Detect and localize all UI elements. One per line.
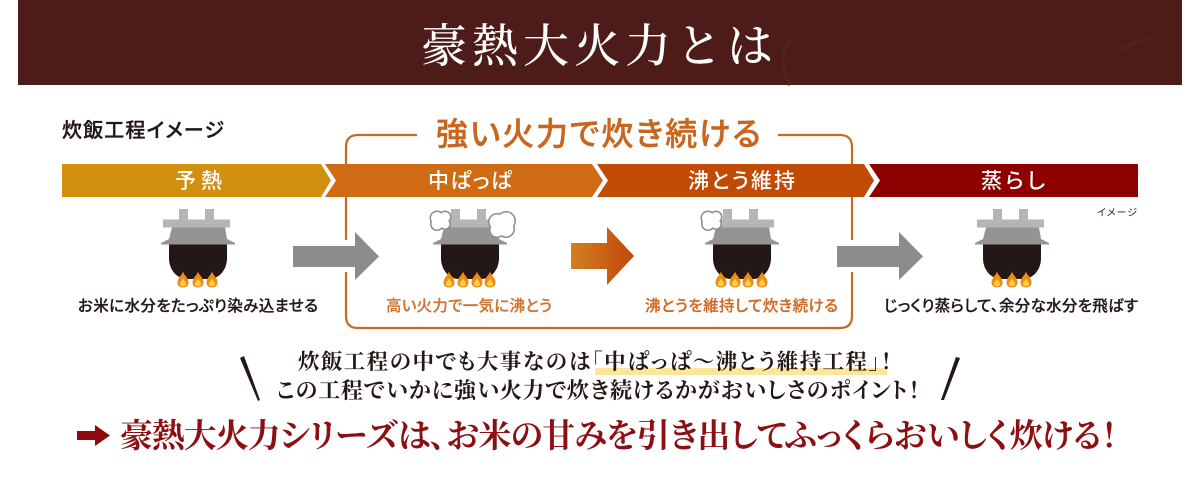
section label: rice cooking process image: 炊飯工程イメージ — [62, 119, 224, 142]
icon: pot 3 with steam and four flames — [700, 209, 779, 288]
icon: pot 2 with steam and four flames — [430, 209, 516, 288]
message line 1: 炊飯工程の中でも大事なのは「中ぱっぱ～沸とう維持工程」！ — [297, 350, 892, 374]
step: keep boiling: 沸とう維持 — [688, 170, 795, 193]
icon: pot 1 with three flames — [161, 209, 235, 288]
step: medium boil — [325, 164, 603, 197]
step: preheat: 予熱 — [175, 170, 222, 193]
step: steaming: 蒸らし — [981, 170, 1046, 193]
arrow: gray 2 — [837, 232, 923, 280]
decorative slash right — [941, 357, 960, 400]
step: medium boil: 中ぱっぱ — [428, 170, 513, 193]
bracket: strong heat section — [346, 135, 852, 328]
step: keep boiling — [597, 164, 874, 197]
step: preheat — [62, 164, 331, 197]
icon: red arrow — [77, 425, 110, 446]
caption: preheat: お米に水分をたっぷり染み込ませる — [78, 297, 318, 315]
arrow: orange gradient — [571, 227, 634, 285]
icon: pot 4 with three flames — [975, 209, 1049, 288]
conclusion: 豪熱大火力シリーズは、お米の甘みを引き出してふっくらおいしく炊ける！ — [120, 418, 1118, 455]
arrow: gray 1 — [293, 232, 379, 280]
bracket heading: 強い火力で炊き続ける — [436, 116, 761, 152]
highlight marker — [595, 368, 887, 375]
caption: medium boil: 高い火力で一気に沸とう — [386, 297, 552, 315]
caption: steaming: じっくり蒸らして、余分な水分を飛ばす — [884, 297, 1138, 315]
step: steaming — [869, 164, 1138, 197]
note: image only: イメージ — [1097, 208, 1137, 219]
title: 豪熱大火力とは — [421, 21, 773, 72]
message line 2: この工程でいかに強い火力で炊き続けるかがおいしさのポイント！ — [276, 378, 920, 403]
decorative slash left — [240, 356, 260, 401]
header banner — [18, 0, 1182, 85]
process bar — [62, 164, 1138, 197]
caption: keep boiling: 沸とうを維持して炊き続ける — [645, 297, 838, 315]
